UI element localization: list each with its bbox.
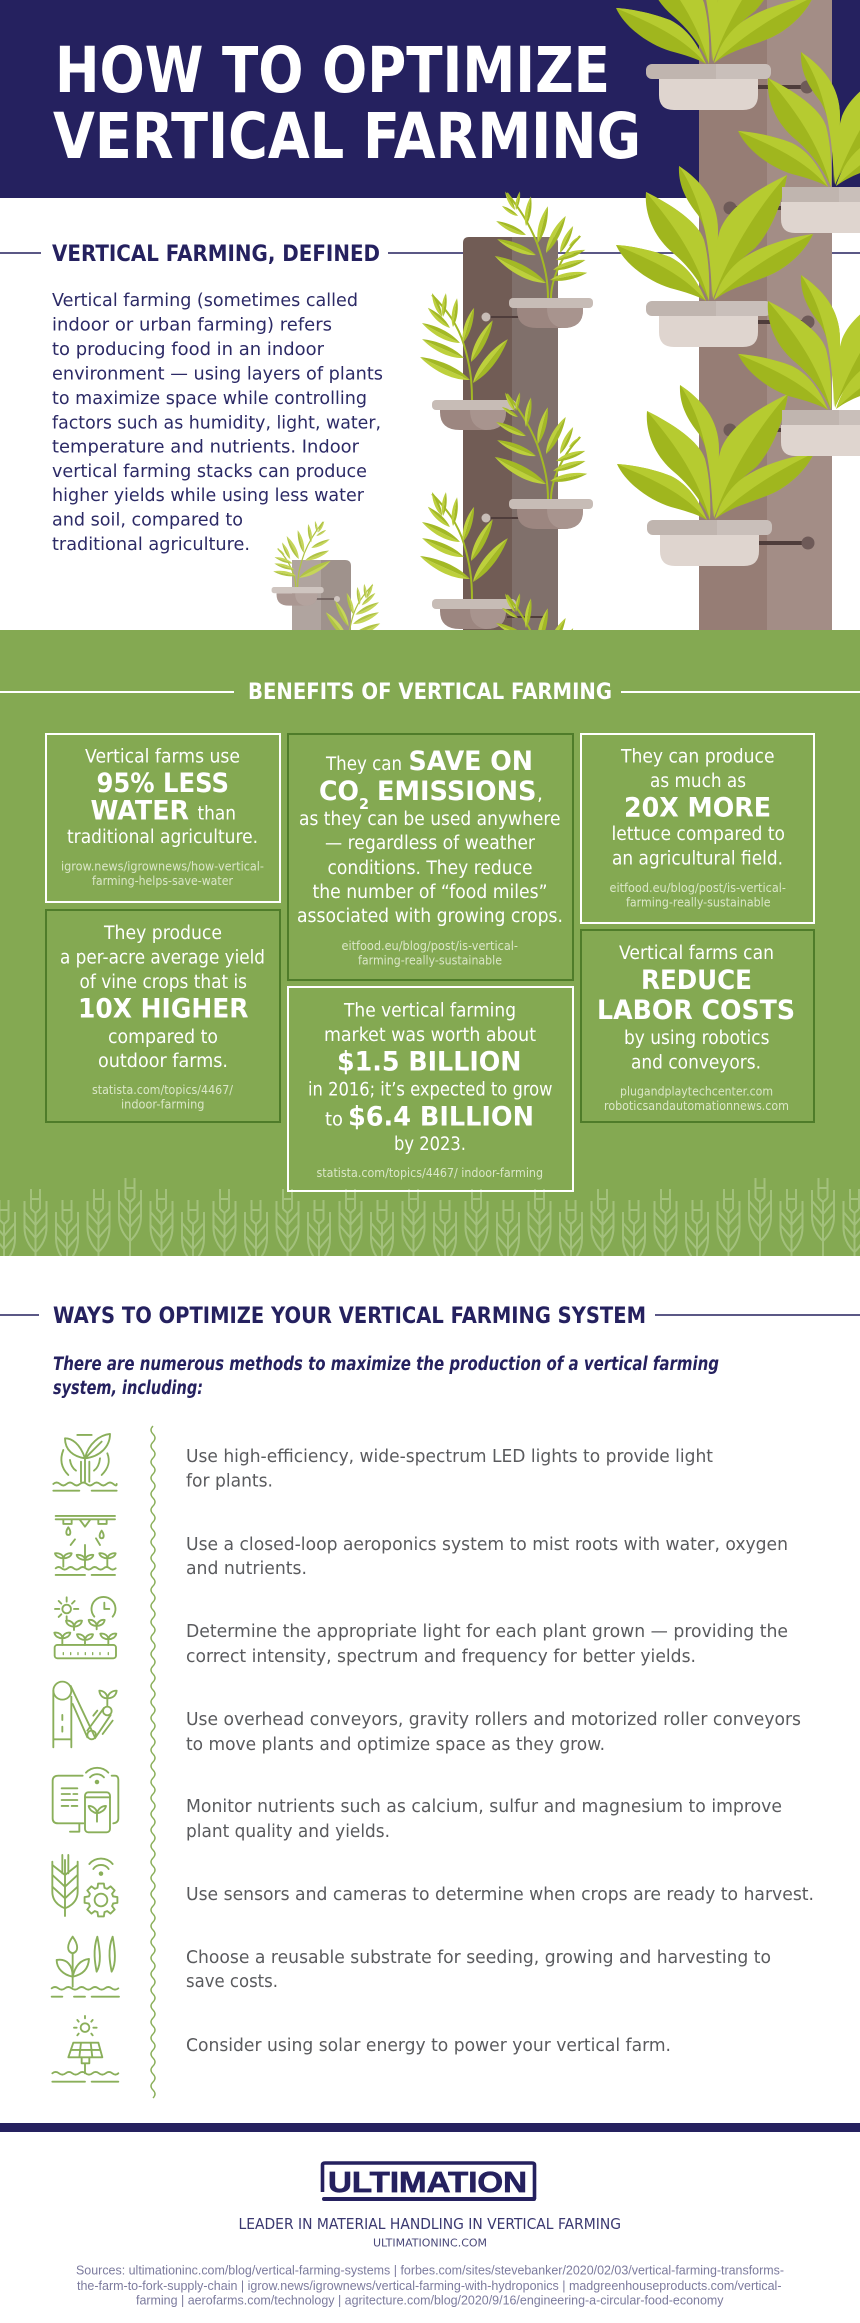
definition text block: environment — using layers of plants: [52, 364, 383, 384]
card: 20x more lettuce: 20X MORE: [624, 792, 771, 824]
panel: benefits background: [0, 630, 860, 1256]
logo: Ultimation: [322, 2163, 536, 2201]
heading: vertical farming defined: VERTICAL FARMING, DEFINED: [52, 241, 380, 267]
card: 95% less water: than: [198, 804, 236, 824]
list item 5: [186, 1796, 782, 1842]
icon: conveyor: [53, 1682, 117, 1747]
definition text block: higher yields while using less water: [52, 485, 365, 506]
card: save on CO2 emissions: EMISSIONS: [377, 776, 536, 807]
definition text block: vertical farming stacks can produce: [52, 461, 367, 482]
intro text: There are numerous methods to maximize the production of a vertical farming: [53, 1354, 719, 1375]
card: 95% less water: WATER: [90, 796, 189, 826]
icon: aeroponic mist: [55, 1516, 116, 1575]
list item 4: [186, 1709, 801, 1755]
definition text block: temperature and nutrients. Indoor: [52, 436, 360, 458]
card: market worth: $6.4 BILLION: [348, 1102, 534, 1132]
list item 3: Determine the appropriate light for each plant grown — providing the: [186, 1621, 788, 1642]
icon: solar panel: [52, 2016, 118, 2082]
card: 20x more lettuce: eitfood.eu/blog/post/is-vertical-: [610, 880, 786, 895]
heading: benefits: BENEFITS OF VERTICAL FARMING: [248, 680, 612, 705]
card: save on CO2 emissions: as they can be used anywhere: [299, 809, 560, 830]
section rule: defined: [0, 252, 860, 254]
heading: ways to optimize: WAYS TO OPTIMIZE YOUR VERTICAL FARMING SYSTEM: [53, 1303, 646, 1329]
tall pillar with big plants: [616, 0, 860, 632]
title: [53, 34, 641, 173]
list item 1: Use high-efficiency, wide-spectrum LED lights to provide light: [186, 1446, 713, 1467]
list item 7: Choose a reusable substrate for seeding, growing and harvesting to: [186, 1947, 771, 1968]
list item 7: [186, 1947, 771, 1992]
list item 2: [186, 1534, 788, 1579]
card: save on CO2 emissions: They can: [325, 754, 402, 775]
card: save on CO2 emissions: associated with growing crops.: [297, 906, 563, 927]
logo: Ultimation: ULTIMATION: [328, 2167, 527, 2199]
card: 10x higher: compared to: [108, 1027, 218, 1048]
card: 10x higher: indoor-farming: [121, 1096, 204, 1112]
card: save on CO2 emissions: the number of “food miles”: [312, 882, 548, 903]
card: 10x higher: a per-acre average yield: [60, 948, 265, 968]
icon: monitor and phone: [53, 1768, 118, 1832]
card: reduce labor costs: roboticsandautomationnews.com: [604, 1098, 789, 1113]
definition text block: Vertical farming (sometimes called: [52, 290, 358, 311]
card: save on CO2 emissions: farming-really-sustainable: [358, 952, 502, 968]
card: 10x higher: [46, 910, 280, 1122]
title: HOW TO OPTIMIZE: [55, 34, 610, 107]
card: market worth: market was worth about: [324, 1025, 536, 1046]
card: 95% less water: igrow.news/igrownews/how-vertical-: [61, 858, 264, 874]
small faded pillar with ferns: [272, 520, 382, 650]
list item 7: save costs.: [186, 1971, 278, 1992]
sources: farming | aerofarms.com/technology | agritecture.com/blog/2020/9/16/engineering-a-circular-food-economy: [136, 2292, 724, 2308]
sources: Sources: ultimationinc.com/blog/vertical-farming-systems | forbes.com/sites/stevebanker/2020/02/03/vertical-farming-transforms-: [76, 2262, 784, 2278]
card: reduce labor costs: LABOR COSTS: [597, 995, 795, 1026]
list item 1: [186, 1446, 713, 1492]
card: save on CO2 emissions: conditions. They reduce: [328, 858, 532, 879]
card: 20x more lettuce: as much as: [650, 771, 746, 792]
card: 95% less water: [46, 734, 280, 902]
list item 3: [186, 1621, 788, 1667]
header band: [0, 0, 860, 198]
card: save on CO2 emissions: ,: [537, 784, 543, 805]
card: market worth: to: [325, 1110, 343, 1130]
card: market worth: in 2016; it’s expected to grow: [308, 1080, 552, 1100]
card: 10x higher: 10X HIGHER: [78, 994, 249, 1024]
definition text block: to producing food in an indoor: [52, 339, 325, 360]
card: save on CO2 emissions: SAVE ON: [408, 746, 533, 777]
icon: LED lit plant: [53, 1434, 117, 1491]
list item 6: Use sensors and cameras to determine when crops are ready to harvest.: [186, 1884, 814, 1905]
definition text block: and soil, compared to: [52, 510, 243, 530]
sources: the-farm-to-fork-supply-chain | igrow.news/igrownews/vertical-farming-with-hydroponics | madgreenhouseproducts.com/vertical-: [77, 2278, 782, 2293]
section rule: benefits: [0, 691, 860, 693]
wheat pattern: [0, 1178, 860, 1256]
card: 20x more lettuce: an agricultural field.: [612, 848, 783, 870]
definition text block: indoor or urban farming) refers: [52, 314, 332, 336]
card: reduce labor costs: [581, 930, 814, 1122]
card: save on CO2 emissions: — regardless of weather: [325, 833, 535, 854]
card: save on CO2 emissions: CO: [319, 776, 359, 807]
card: 95% less water: traditional agriculture.: [67, 827, 258, 848]
wavy divider: [151, 1426, 155, 2098]
footer bar: [0, 2123, 860, 2132]
tagline: LEADER IN MATERIAL HANDLING IN VERTICAL FARMING: [238, 2215, 621, 2233]
list item 2: Use a closed-loop aeroponics system to mist roots with water, oxygen: [186, 1534, 788, 1555]
definition text block: to maximize space while controlling: [52, 388, 367, 409]
card: 10x higher: statista.com/topics/4467/: [92, 1082, 234, 1097]
card: reduce labor costs: plugandplaytechcenter.com: [620, 1084, 773, 1098]
card: 10x higher: They produce: [103, 923, 222, 944]
card: save on CO2 emissions: [288, 734, 573, 980]
list item 8: Consider using solar energy to power your vertical farm.: [186, 2035, 671, 2056]
definition text block: [52, 290, 383, 555]
list item 5: plant quality and yields.: [186, 1821, 390, 1842]
section rule: ways: [0, 1314, 860, 1316]
definition text block: traditional agriculture.: [52, 534, 250, 555]
card: market worth: The vertical farming: [343, 1000, 516, 1022]
card: 10x higher: of vine crops that is: [80, 972, 247, 993]
list item 1: for plants.: [186, 1470, 273, 1492]
intro text: [53, 1354, 719, 1399]
list item 2: and nutrients.: [186, 1558, 307, 1579]
card: 10x higher: outdoor farms.: [98, 1051, 228, 1072]
intro text: system, including:: [53, 1378, 203, 1399]
definition text block: factors such as humidity, light, water,: [52, 412, 381, 434]
list item 4: to move plants and optimize space as they grow.: [186, 1734, 605, 1755]
card: market worth: by 2023.: [394, 1134, 466, 1155]
card: market worth: statista.com/topics/4467/ indoor-farming: [316, 1165, 543, 1180]
card: reduce labor costs: Vertical farms can: [619, 943, 774, 964]
website: ULTIMATIONINC.COM: [373, 2238, 487, 2250]
card: 20x more lettuce: farming-really-sustainable: [626, 894, 771, 910]
card: reduce labor costs: by using robotics: [624, 1028, 770, 1049]
card: reduce labor costs: REDUCE: [641, 965, 752, 996]
card: reduce labor costs: and conveyors.: [631, 1052, 761, 1074]
card: 20x more lettuce: lettuce compared to: [612, 824, 785, 845]
sources: [76, 2262, 784, 2308]
icon: seedling substrate: [52, 1937, 119, 1997]
card: save on CO2 emissions: 2: [359, 795, 369, 813]
list item 3: correct intensity, spectrum and frequency for better yields.: [186, 1646, 696, 1667]
icon: wheat and gear: [52, 1855, 117, 1916]
card: 20x more lettuce: [581, 734, 814, 923]
card: market worth: $1.5 BILLION: [337, 1046, 522, 1078]
title: VERTICAL FARMING: [53, 100, 641, 173]
icon: light and timer: [54, 1597, 116, 1658]
list item 5: Monitor nutrients such as calcium, sulfur and magnesium to improve: [186, 1796, 782, 1817]
card: 95% less water: Vertical farms use: [85, 746, 240, 768]
card: 20x more lettuce: They can produce: [620, 746, 774, 768]
list item 4: Use overhead conveyors, gravity rollers and motorized roller conveyors: [186, 1709, 801, 1730]
middle pillar with ferns: [418, 191, 593, 700]
card: save on CO2 emissions: eitfood.eu/blog/post/is-vertical-: [342, 938, 518, 953]
card: 95% less water: 95% LESS: [96, 768, 229, 799]
card: market worth: [288, 987, 573, 1191]
card: 95% less water: farming-helps-save-water: [92, 873, 234, 888]
